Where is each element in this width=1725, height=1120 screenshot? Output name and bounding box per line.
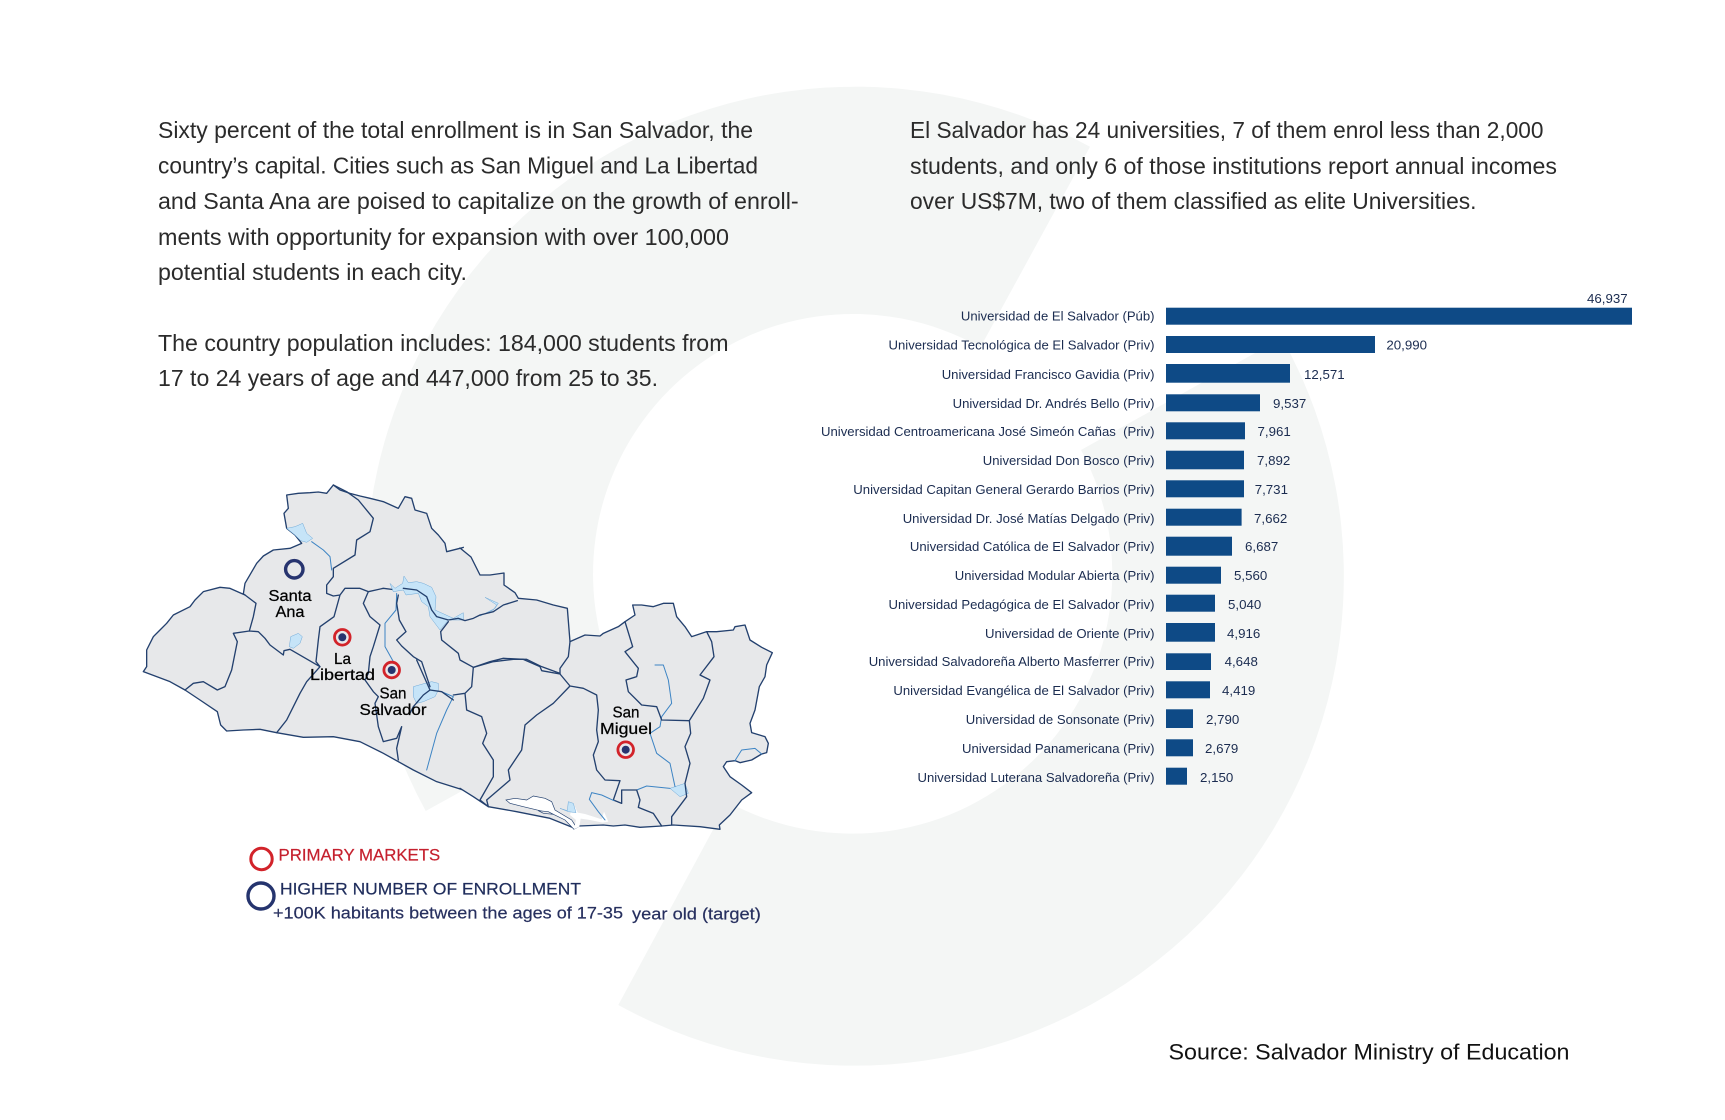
row: Universidad Católica: Universidad Católica de El Salvador (Priv) [910,539,1154,554]
row: Universidad Evangélica: 4,419 [1222,683,1255,698]
row: Universidad Católica [910,537,1278,556]
map: western departments [143,485,463,790]
lake: Ilopango [413,682,438,703]
legend: primary markets [251,846,440,870]
city label: San Miguel: San [612,704,640,722]
row: Universidad Tecnológica: Universidad Tecnológica de El Salvador (Priv) [888,338,1154,353]
lake: Güija [287,523,313,542]
row: Universidad Dr. Andrés Bello [953,394,1306,411]
row: Universidad Capitan General Gerardo Barrios: Universidad Capitan General Gerardo Barrios (Priv) [853,482,1154,497]
text block: enrollment by city: potential students in each city. [158,259,467,285]
map: eastern departments [453,548,772,829]
map: Jiquilisco bay [506,793,614,829]
row: Universidad Salvadoreña Alberto Masferrer: Universidad Salvadoreña Alberto Masferrer (Priv) [869,654,1154,669]
text block: universities overview: over US$7M, two of them classified as elite Universities. [910,188,1476,214]
row: Universidad de El Salvador [961,291,1632,325]
rivers east [637,665,762,790]
row: Universidad Panamericana [962,739,1238,756]
row: Universidad Pedagógica: Universidad Pedagógica de El Salvador (Priv) [888,597,1154,612]
legend: higher number of enrollment [248,880,761,924]
row: Universidad Luterana Salvadoreña: Universidad Luterana Salvadoreña (Priv) [918,770,1154,785]
source note: Source: Salvador Ministry of Education [1168,1040,1570,1064]
row: Universidad Modular Abierta: Universidad Modular Abierta (Priv) [955,568,1154,583]
row: Universidad Modular Abierta: 5,560 [1234,568,1267,583]
department borders west [185,485,453,760]
legend [248,846,761,924]
legend: primary markets: PRIMARY MARKETS [278,846,440,864]
lake: Coatepeque [289,633,302,648]
city label: La Libertad: La [334,651,351,668]
row: Universidad Evangélica [893,681,1255,698]
text block: enrollment by city: Sixty percent of the total enrollment is in San Salvador, the [158,117,753,143]
text block: universities overview [910,117,1557,214]
legend: higher number of enrollment: HIGHER NUMBER OF ENROLLMENT [280,880,581,898]
row: Universidad Luterana Salvadoreña [918,768,1233,785]
row: Universidad Tecnológica: 20,990 [1386,338,1427,353]
marker: La Libertad [334,630,350,645]
sand island [538,811,553,814]
lake: Olomega [670,783,688,797]
row: Universidad de Sonsonate [966,709,1239,728]
row: Universidad Pedagógica: 5,040 [1228,597,1261,612]
row: Universidad de Oriente: 4,916 [1227,626,1260,641]
text block: country population [158,330,728,391]
city label: La Libertad: Libertad [310,667,375,684]
city label: Santa Ana: Santa [268,588,312,605]
river: San Miguel estuary [589,793,614,820]
text block: country population: The country population includes: 184,000 students from [158,330,728,356]
row: Universidad de Sonsonate: 2,790 [1206,712,1239,727]
department borders: Cabañas and Cuscatlán [397,588,560,687]
row: Universidad Panamericana: 2,679 [1205,741,1238,756]
row: Universidad Don Bosco [983,451,1290,469]
text block: enrollment by city: and Santa Ana are poised to capitalize on the growth of enroll- [158,188,799,214]
row: Universidad Francisco Gavidia: 12,571 [1304,367,1345,382]
text block: universities overview: El Salvador has 24 universities, 7 of them enrol less than 2,000 [910,117,1544,143]
row: Universidad Centroamericana [821,422,1291,439]
row: Universidad Dr. Andrés Bello: 9,537 [1273,396,1306,411]
city label: Santa Ana: Ana [276,604,305,621]
bar chart: enrollment by university [821,291,1632,785]
row: Universidad Don Bosco: Universidad Don Bosco (Priv) [983,453,1154,468]
city label: San Salvador: Salvador [360,702,426,719]
city label: San Miguel [600,704,652,738]
city label: La Libertad [310,651,375,684]
city label: Santa Ana [268,588,312,621]
row: Universidad Centroamericana: 7,961 [1258,424,1291,439]
city label: San Miguel: Miguel [600,721,652,738]
row: Universidad de El Salvador: 46,937 [1587,291,1628,306]
row: Universidad de Oriente [985,623,1260,642]
row: Universidad Centroamericana: Universidad Centroamericana José Simeón Cañas (Priv) [821,424,1154,439]
river: Acelhuate [385,593,397,662]
text block: enrollment by city [158,117,799,285]
row: Universidad de Sonsonate: Universidad de Sonsonate (Priv) [966,712,1154,727]
row: Universidad Católica: 6,687 [1245,539,1278,554]
text block: enrollment by city: ments with opportunity for expansion with over 100,000 [158,224,729,250]
row: Universidad Dr. José Matías Delgado [903,509,1287,526]
row: Universidad Dr. José Matías Delgado: 7,662 [1254,511,1287,526]
row: Universidad Dr. José Matías Delgado: Universidad Dr. José Matías Delgado (Priv) [903,511,1154,526]
row: Universidad Evangélica: Universidad Evangélica de El Salvador (Priv) [893,683,1154,698]
row: Universidad Francisco Gavidia: Universidad Francisco Gavidia (Priv) [942,367,1154,382]
row: Universidad Francisco Gavidia [942,364,1345,383]
row: Universidad de Oriente: Universidad de Oriente (Priv) [985,626,1154,641]
row: Universidad Capitan General Gerardo Barrios: 7,731 [1255,482,1288,497]
map: Lempa river and reservoir [385,576,560,687]
row: Universidad Salvadoreña Alberto Masferrer [869,653,1258,670]
background ring graphic [366,87,1344,1066]
row: Universidad Panamericana: Universidad Panamericana (Priv) [962,741,1154,756]
text block: enrollment by city: country’s capital. Cities such as San Miguel and La Libertad [158,152,758,178]
row: Universidad Capitan General Gerardo Barrios [853,480,1288,497]
marker: San Salvador [384,662,400,678]
water: western inlet [506,796,576,829]
water: eastern inlet [570,803,608,829]
marker: Santa Ana [286,561,303,578]
city label: San Salvador: San [380,685,406,702]
row: Universidad Modular Abierta [955,567,1267,584]
row: Universidad Salvadoreña Alberto Masferrer: 4,648 [1225,654,1258,669]
row: Universidad Tecnológica [888,336,1427,353]
text block: country population: 17 to 24 years of age and 447,000 from 25 to 35. [158,365,658,391]
rivers west [312,542,453,770]
text block: universities overview: students, and only 6 of those institutions report annual incomes [910,153,1557,179]
row: Universidad Pedagógica [888,595,1261,612]
row: Universidad de El Salvador: Universidad de El Salvador (Púb) [961,309,1154,324]
map of El Salvador [143,485,772,829]
department borders east [453,622,714,826]
row: Universidad Dr. Andrés Bello: Universidad Dr. Andrés Bello (Priv) [953,396,1154,411]
lake: Suchitlán [390,576,463,630]
legend: higher number of enrollment: year old (target) [632,904,761,924]
city label: San Salvador [360,685,426,719]
legend: higher number of enrollment: +100K habitants between the ages of 17-35 [273,904,623,922]
lake: upper Lempa arm [480,597,498,616]
marker: San Miguel [618,742,634,758]
lake: bay mangrove [560,802,576,813]
row: Universidad Luterana Salvadoreña: 2,150 [1200,770,1233,785]
row: Universidad Don Bosco: 7,892 [1257,453,1290,468]
